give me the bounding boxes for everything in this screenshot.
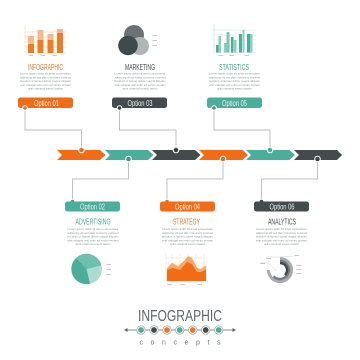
chart: analytics radial: Lorem (296, 273, 302, 275)
text block: advertising: tincidunt ut laoreet dolore magna aliquam (68, 236, 118, 239)
chart: statistics teal bars (214, 24, 256, 57)
text block: infographic: adipiscing elit sed diam nonummy euismod (20, 76, 72, 79)
chart: statistics teal bars: Lorem (229, 55, 235, 57)
chart: advertising pie: Lorem (106, 269, 112, 271)
timeline connectors (25, 108, 318, 202)
option 02 label: Option 02 (80, 202, 105, 212)
chart: infographic orange bars (25, 25, 66, 57)
chart: strategy area: Lorem (180, 284, 186, 286)
heading: infographic: INFOGRAPHIC (28, 63, 63, 72)
chart: analytics radial: Lorem (296, 265, 302, 267)
chart: statistics teal bars: Lorem (218, 55, 224, 57)
chart: marketing venn: Lorem (152, 35, 158, 37)
heading: advertising: ADVERTISING (76, 218, 110, 226)
heading: strategy: STRATEGY (173, 218, 200, 226)
text block: advertising: adipiscing elit sed diam nonummy euismod (68, 232, 119, 235)
chart: analytics radial: Lorem (294, 255, 300, 257)
option 03 label: Option 03 (128, 99, 153, 108)
text block: infographic (20, 72, 72, 91)
chart: analytics radial: Lorem (266, 258, 272, 260)
text block: advertising (68, 228, 119, 246)
chart: strategy area: Lorem (197, 284, 203, 286)
option 03 label (112, 98, 167, 108)
text block: marketing: quis nostrud exerci tation (122, 88, 158, 91)
chart: advertising pie: Lorem (106, 274, 112, 276)
chart: infographic orange bars: Lorem (40, 55, 46, 57)
chart: marketing venn: Lorem (152, 40, 158, 42)
text block: strategy: Lorem ipsum dolor sit amet consectetur (162, 228, 213, 231)
text block: infographic: quis nostrud exerci tation (28, 88, 64, 91)
text block: advertising: Lorem ipsum dolor sit amet consectetur (68, 228, 119, 231)
chart: analytics radial: Lorem (260, 263, 266, 265)
chart: marketing venn: Lorem (152, 45, 158, 47)
text block: marketing (114, 72, 166, 91)
text block: analytics: quis nostrud exerci tation (264, 243, 300, 246)
text block: analytics: adipiscing elit sed diam nonummy euismod (256, 232, 308, 235)
option 06 label: Option 06 (270, 202, 295, 212)
text block: advertising: erat volutpat wisi enim ad minim veniam (68, 239, 118, 242)
chart: advertising pie: Lorem (106, 264, 112, 266)
chart: analytics radial: Lorem (296, 269, 302, 271)
text block: strategy (162, 228, 214, 246)
chart: strategy area (166, 253, 208, 286)
option 02 label (65, 202, 120, 212)
text block: analytics: erat volutpat wisi enim ad minim veniam (256, 239, 307, 242)
text block: strategy: tincidunt ut laoreet dolore magna aliquam (162, 236, 213, 239)
heading: statistics: STATISTICS (219, 63, 249, 72)
chart: analytics radial (260, 255, 302, 282)
text block: infographic: tincidunt ut laoreet dolore magna aliquam (20, 80, 71, 83)
option 04 label: Option 04 (175, 202, 200, 212)
text block: statistics: quis nostrud exerci tation (217, 88, 253, 91)
text block: statistics: adipiscing elit sed diam nonummy euismod (209, 76, 261, 79)
chart: strategy area: Lorem (167, 284, 173, 286)
footer subtitle: concepts (140, 340, 221, 346)
footer title: INFOGRAPHIC (138, 308, 222, 325)
text block: strategy: erat volutpat wisi enim ad minim veniam (162, 239, 213, 242)
chart: advertising pie (71, 254, 112, 284)
text block: strategy: adipiscing elit sed diam nonummy euismod (162, 232, 214, 235)
text block: marketing: tincidunt ut laoreet dolore magna aliquam (114, 80, 166, 83)
text block: infographic: Lorem ipsum dolor sit amet consectetur (20, 72, 71, 76)
text block: strategy: quis nostrud exerci tation (170, 243, 206, 246)
text block: statistics: erat volutpat wisi enim ad minim veniam (209, 84, 260, 87)
text block: analytics: tincidunt ut laoreet dolore magna aliquam (256, 236, 307, 239)
text block: statistics: Lorem ipsum dolor sit amet consectetur (209, 72, 260, 76)
option 04 label (160, 202, 215, 212)
text block: analytics (256, 228, 308, 246)
option 05 label: Option 05 (222, 99, 247, 108)
text block: advertising: quis nostrud exerci tation (76, 243, 111, 246)
chart: infographic orange bars: Lorem (28, 55, 34, 57)
heading: analytics: ANALYTICS (268, 218, 296, 226)
chart: infographic orange bars: Lorem (52, 55, 58, 57)
text block: statistics (209, 72, 261, 91)
timeline dots (23, 106, 320, 204)
text block: marketing: Lorem ipsum dolor sit amet consectetur (114, 72, 166, 76)
text block: marketing: erat volutpat wisi enim ad minim veniam (114, 84, 166, 87)
chart: marketing venn (118, 25, 158, 55)
text block: marketing: adipiscing elit sed diam nonummy euismod (114, 76, 166, 79)
text block: statistics: tincidunt ut laoreet dolore magna aliquam (209, 80, 260, 83)
timeline arrows (57, 150, 342, 160)
heading: marketing: MARKETING (125, 63, 155, 72)
option 01 label (18, 98, 73, 108)
text block: infographic: erat volutpat wisi enim ad minim veniam (20, 84, 71, 87)
chart: statistics teal bars: Lorem (244, 55, 250, 57)
option 06 label (254, 202, 309, 212)
text block: analytics: Lorem ipsum dolor sit amet consectetur (256, 228, 307, 231)
option 05 label (207, 98, 262, 108)
option 01 label: Option 01 (34, 99, 59, 108)
footer timeline (124, 326, 236, 334)
